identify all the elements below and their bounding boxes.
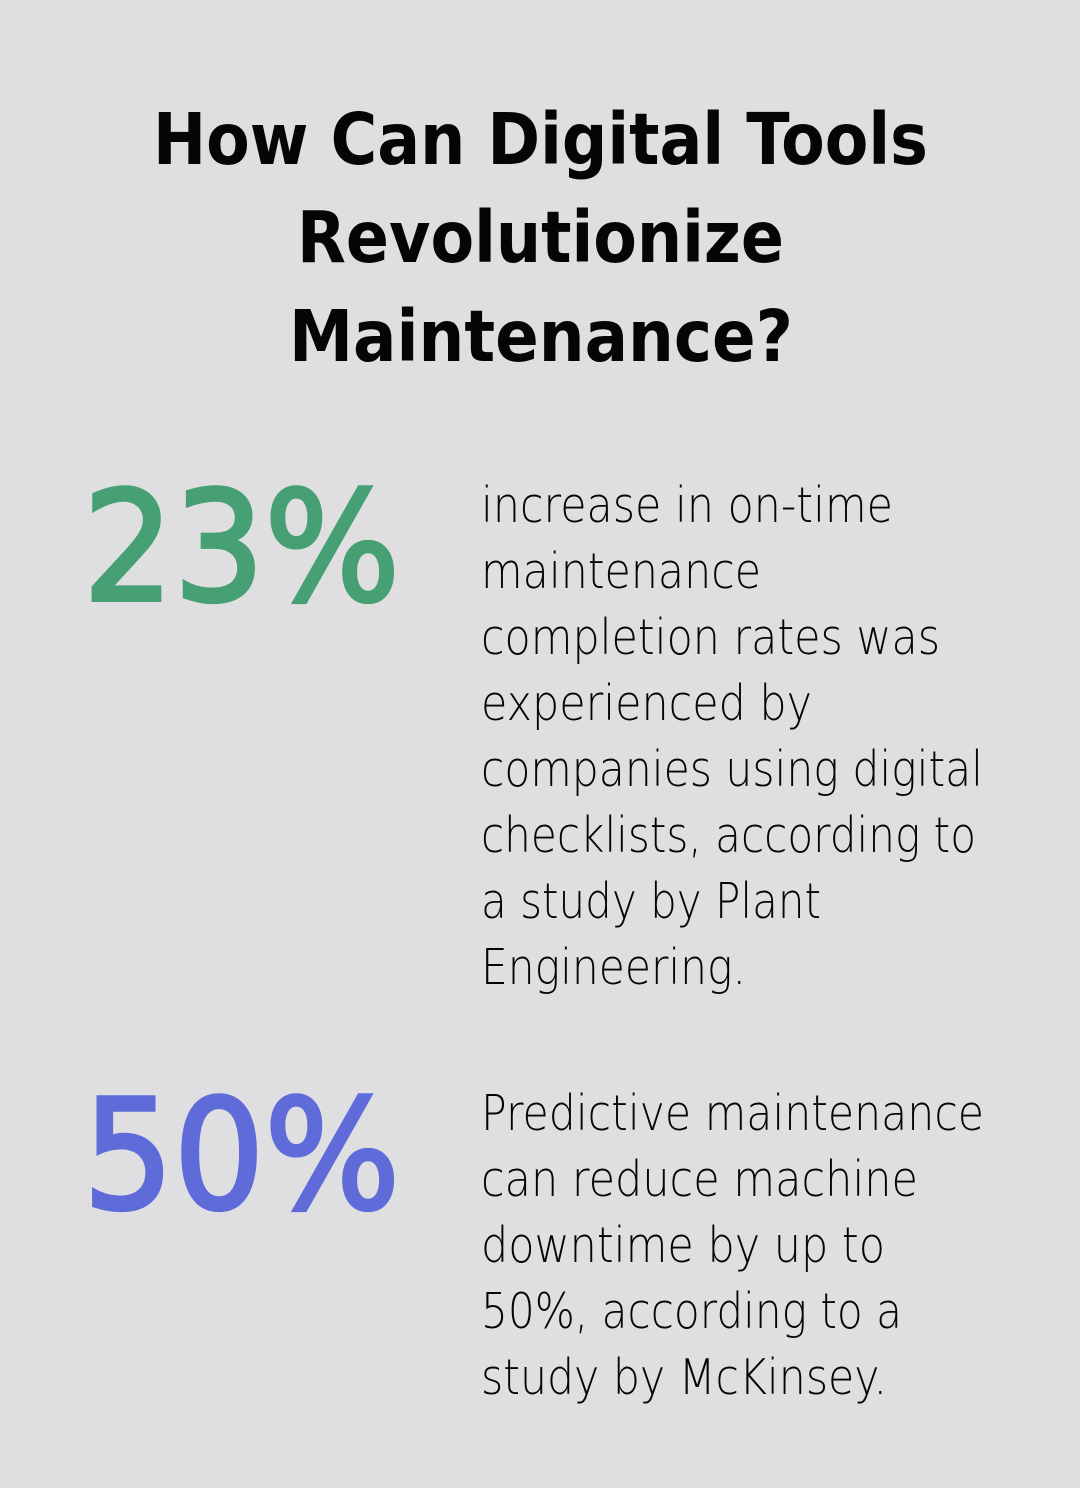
text block: predictive maintenance description: downtime by up to: [481, 1217, 885, 1274]
text block: on-time completion description: companies using digital: [481, 741, 983, 798]
text block: on-time completion description: completion rates was: [481, 609, 940, 666]
text block: predictive maintenance description: study by McKinsey.: [481, 1349, 887, 1406]
text block: on-time completion description: [481, 477, 983, 996]
title: Revolutionize: [297, 196, 784, 279]
text block: on-time completion description: checklists, according to: [481, 807, 976, 864]
text block: on-time completion description: increase in on-time: [481, 477, 893, 534]
text block: on-time completion description: Engineering.: [481, 939, 746, 996]
text block: predictive maintenance description: can reduce machine: [481, 1151, 918, 1208]
stat: 23%: 23%: [83, 459, 400, 636]
stat: 50%: 50%: [83, 1067, 400, 1244]
title: Maintenance?: [289, 295, 793, 378]
title: How Can Digital Tools: [153, 98, 928, 181]
text block: on-time completion description: maintenance: [481, 543, 761, 600]
text block: on-time completion description: a study by Plant: [481, 873, 821, 930]
text block: predictive maintenance description: Predictive maintenance: [481, 1085, 984, 1142]
title: [153, 98, 928, 378]
text block: predictive maintenance description: [481, 1085, 984, 1406]
text block: predictive maintenance description: 50%, according to a: [481, 1283, 902, 1340]
text block: on-time completion description: experienced by: [481, 675, 812, 732]
